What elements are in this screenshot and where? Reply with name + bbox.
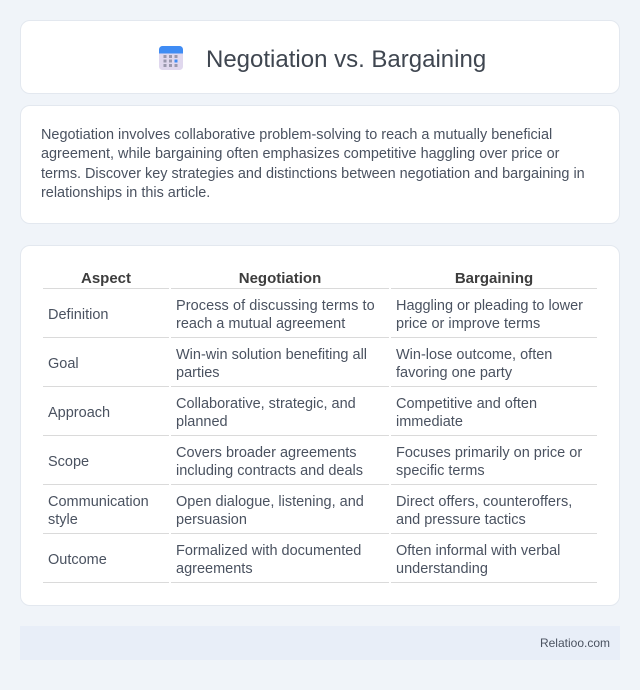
- row: definition: reach a mutual agreement: [176, 316, 345, 332]
- row: goal: favoring one party: [396, 365, 512, 381]
- row: outcome: Outcome: [48, 552, 107, 568]
- row: approach: planned: [176, 414, 228, 430]
- row: definition: Process of discussing terms to: [176, 298, 375, 314]
- row: communication style: style: [48, 512, 78, 528]
- row: scope: Covers broader agreements: [176, 445, 357, 461]
- row: communication style: Communication: [48, 494, 149, 510]
- row: communication style: [48, 494, 572, 528]
- row: definition: Definition: [48, 307, 108, 323]
- panel: comparison table: [20, 245, 620, 606]
- row: scope: Scope: [48, 454, 89, 470]
- row: approach: Competitive and often: [396, 396, 537, 412]
- row: definition: Haggling or pleading to lower: [396, 298, 583, 314]
- row: communication style: and pressure tactics: [396, 512, 526, 528]
- row: communication style: Direct offers, counteroffers,: [396, 494, 572, 510]
- intro text: terms. Discover key strategies and distinctions between negotiation and bargaining in: [41, 166, 585, 182]
- intro text: relationships in this article.: [41, 185, 210, 201]
- row: scope: including contracts and deals: [176, 463, 363, 479]
- row: approach: immediate: [396, 414, 463, 430]
- row: approach: Collaborative, strategic, and: [176, 396, 356, 412]
- row: communication style: persuasion: [176, 512, 247, 528]
- intro text: [41, 127, 585, 201]
- icon: calendar: [159, 46, 183, 70]
- row: scope: specific terms: [396, 463, 485, 479]
- row: outcome: understanding: [396, 561, 488, 577]
- row: definition: [48, 298, 583, 332]
- row: goal: Goal: [48, 356, 79, 372]
- table header: aspect: Aspect: [81, 270, 131, 287]
- row: goal: Win-lose outcome, often: [396, 347, 552, 363]
- title text: Negotiation vs. Bargaining: [206, 46, 486, 73]
- row: scope: Focuses primarily on price or: [396, 445, 582, 461]
- row: approach: Approach: [48, 405, 110, 421]
- row: definition: price or improve terms: [396, 316, 540, 332]
- row: scope: [48, 445, 582, 479]
- table header: negotiation: Negotiation: [239, 270, 321, 287]
- panel: title: [20, 20, 620, 94]
- intro text: Negotiation involves collaborative problem-solving to reach a mutually beneficial: [41, 127, 552, 143]
- row: outcome: Formalized with documented: [176, 543, 361, 559]
- intro text: agreement, while bargaining often emphasizes competitive haggling over price or: [41, 146, 559, 162]
- footer bar: [20, 626, 620, 660]
- table header: bargaining: Bargaining: [455, 270, 533, 287]
- row: goal: Win-win solution benefiting all: [176, 347, 367, 363]
- row: outcome: agreements: [176, 561, 253, 577]
- row: approach: [48, 396, 537, 430]
- panel: intro: [20, 105, 620, 224]
- row: goal: parties: [176, 365, 220, 381]
- row: outcome: [48, 543, 560, 577]
- row: goal: [48, 347, 552, 381]
- footer source text: Relatioo.com: [540, 636, 610, 650]
- row: communication style: Open dialogue, listening, and: [176, 494, 364, 510]
- row: outcome: Often informal with verbal: [396, 543, 560, 559]
